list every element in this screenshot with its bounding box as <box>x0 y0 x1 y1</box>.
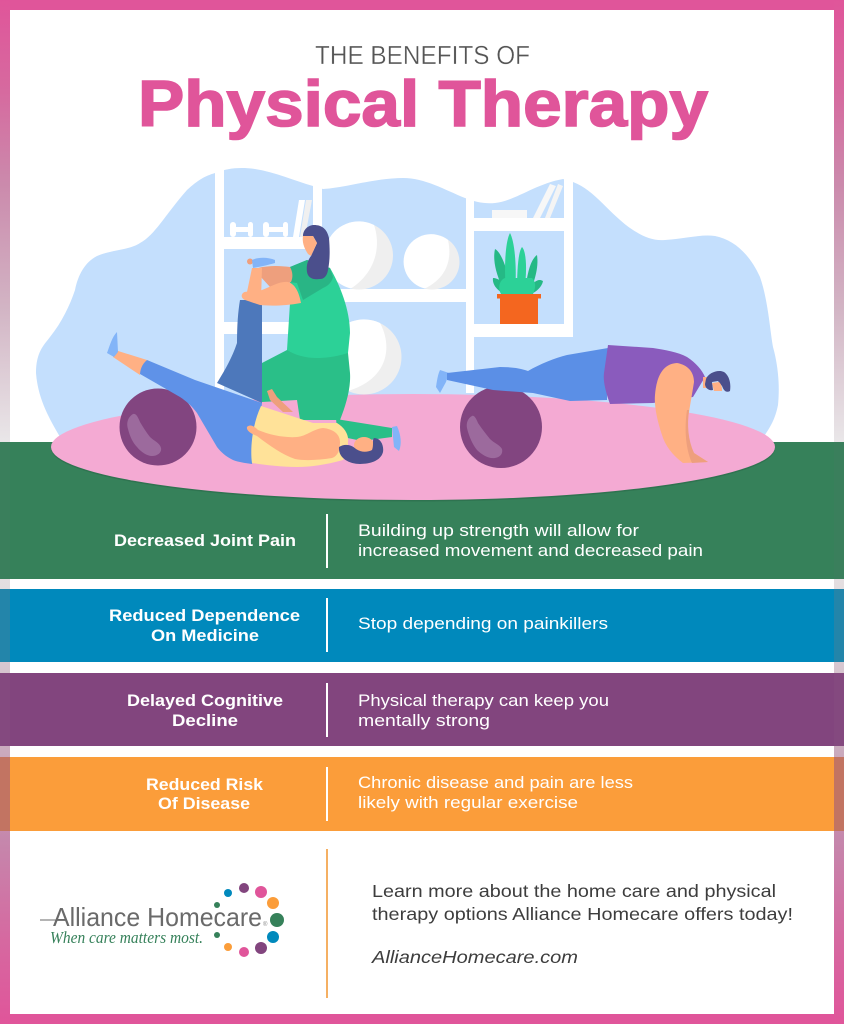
patient foot <box>107 332 118 357</box>
man arm <box>655 363 708 463</box>
row: reduced dependence on medicine <box>109 598 608 652</box>
row description: Chronic disease and pain are less <box>358 774 633 792</box>
books <box>293 184 563 237</box>
row description <box>358 692 609 730</box>
row heading <box>109 607 300 645</box>
subtitle: the benefits of: THE BENEFITS OF <box>315 40 530 70</box>
panel: benefit rows background <box>0 442 844 831</box>
potted plant <box>493 233 543 324</box>
row: delayed cognitive decline <box>127 683 609 737</box>
patient back arm <box>267 389 293 412</box>
logo tagline: When care matters most. <box>50 928 203 947</box>
row description <box>358 774 633 812</box>
therapist sleeve shade <box>288 260 333 300</box>
footer call to action <box>371 881 793 967</box>
patient raised leg <box>217 300 262 403</box>
patient figure <box>107 258 383 467</box>
illustration: therapy room <box>36 168 779 502</box>
therapist trousers <box>262 350 350 420</box>
patient arm <box>247 426 340 460</box>
logo wordmark: Alliance Homecare <box>53 902 262 932</box>
row divider <box>326 683 328 737</box>
row heading <box>146 776 264 813</box>
row heading: Of Disease <box>158 795 250 813</box>
row heading: On Medicine <box>151 627 259 645</box>
patient lower leg <box>113 350 147 375</box>
background blob <box>36 168 779 442</box>
row heading: Delayed Cognitive <box>127 692 283 710</box>
row: reduced risk of disease <box>146 767 633 821</box>
row description: Stop depending on painkillers <box>358 615 608 633</box>
therapist front arm <box>242 282 301 306</box>
row description: mentally strong <box>358 712 490 730</box>
man doing plank on ball <box>436 345 730 463</box>
patient hair <box>339 438 383 464</box>
therapist back leg <box>336 419 392 441</box>
floor mat <box>51 394 775 502</box>
row divider <box>326 767 328 821</box>
row description: Building up strength will allow for <box>358 522 640 540</box>
footer call to action: therapy options Alliance Homecare offers today! <box>372 904 793 924</box>
man arm shade <box>686 410 708 463</box>
exercise ball left <box>120 388 196 466</box>
footer call to action: Learn more about the home care and physical <box>372 881 776 901</box>
logo: alliance homecare <box>40 883 284 957</box>
therapist face <box>303 236 317 256</box>
row heading: Reduced Dependence <box>109 607 300 625</box>
man neck <box>703 377 709 388</box>
row description: Physical therapy can keep you <box>358 692 609 710</box>
logo dot ring <box>214 883 284 957</box>
patient hand on foot <box>247 258 253 264</box>
row divider <box>326 514 328 568</box>
man head <box>705 371 730 392</box>
man shirt <box>604 345 705 404</box>
row description: increased movement and decreased pain <box>358 542 703 560</box>
row description <box>358 522 703 560</box>
row heading: Decline <box>172 712 238 730</box>
logo wordmark: ® <box>263 921 268 928</box>
patient shirt <box>251 406 348 467</box>
row description: likely with regular exercise <box>358 794 578 812</box>
man face <box>712 382 722 391</box>
therapist shoe <box>392 426 401 451</box>
row heading <box>127 692 283 730</box>
patient face <box>354 437 374 453</box>
dumbbells <box>230 222 288 237</box>
therapist torso <box>287 260 350 358</box>
footer call to action: AllianceHomecare.com <box>371 947 578 967</box>
therapist back arm <box>258 266 292 287</box>
man shoe <box>436 370 449 393</box>
row divider <box>326 598 328 652</box>
man trousers <box>447 348 608 401</box>
patient hips and leg <box>139 360 262 464</box>
exercise ball right <box>460 386 542 468</box>
main title: physical therapy: Physical Therapy <box>138 67 708 140</box>
exercise balls on shelf <box>325 221 460 394</box>
therapist figure <box>258 225 401 451</box>
row: decreased joint pain <box>114 514 703 568</box>
title <box>138 40 708 140</box>
footer divider <box>326 849 328 998</box>
row heading: Reduced Risk <box>146 776 264 794</box>
patient raised foot <box>252 258 275 268</box>
row heading: Decreased Joint Pain <box>114 532 296 550</box>
bookshelf <box>215 170 573 393</box>
therapist hair <box>303 225 330 279</box>
patient raised calf <box>245 268 262 300</box>
